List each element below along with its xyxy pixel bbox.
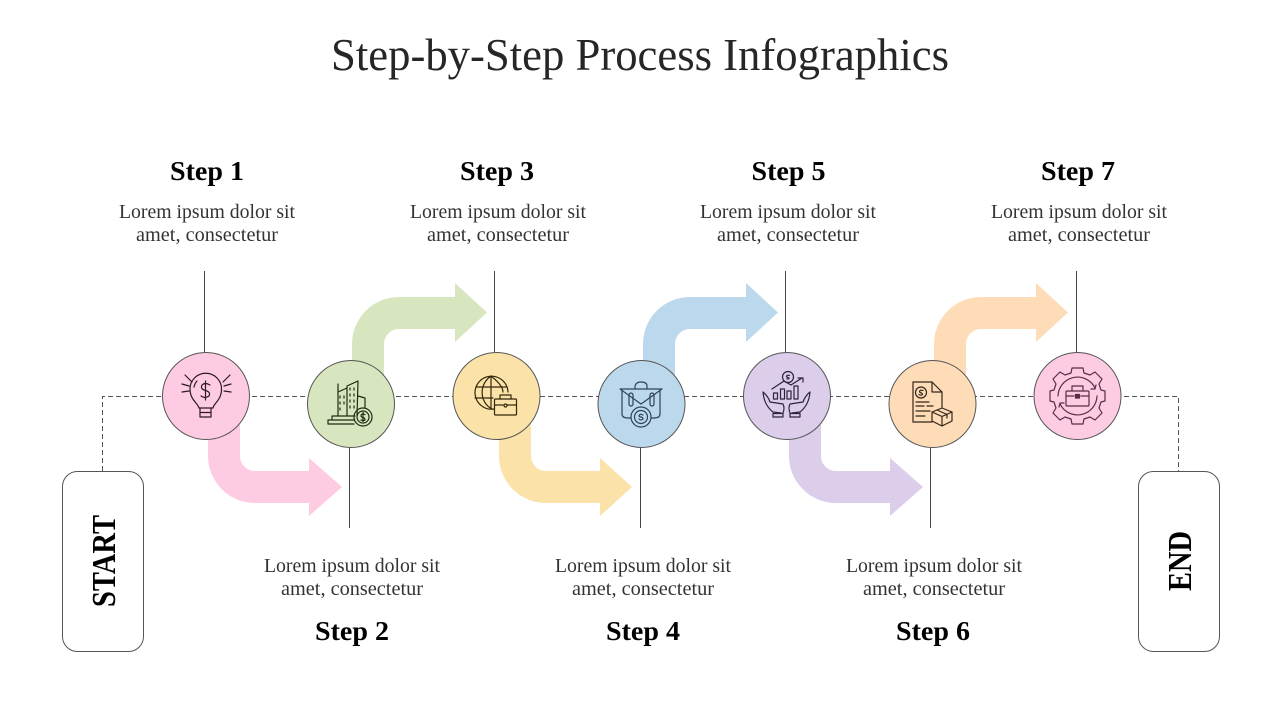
- step 6 text: [846, 555, 1022, 646]
- step 3 text: amet, consectetur: [427, 224, 569, 246]
- step 3 text: Step 3: [460, 156, 534, 186]
- arrow: orange: [950, 283, 1068, 375]
- step 6 text: amet, consectetur: [863, 578, 1005, 600]
- arrow: blue: [659, 283, 778, 375]
- step 5 text: [700, 156, 876, 246]
- node 1: lightbulb: [162, 352, 250, 440]
- node 5: hands with growth chart: [744, 352, 830, 440]
- arrow: pink: [224, 425, 342, 516]
- step 2 text: Step 2: [315, 616, 389, 646]
- step 1 text: Step 1: [170, 156, 244, 186]
- step 6 text: Lorem ipsum dolor sit: [846, 555, 1022, 577]
- end box: [1138, 472, 1220, 652]
- step 1 text: [119, 156, 295, 246]
- node 4: bag with coin: [598, 360, 685, 448]
- node 2: buildings: [308, 360, 394, 448]
- step 5 text: Step 5: [752, 156, 826, 186]
- step 7 text: [991, 156, 1167, 246]
- step 7 text: Lorem ipsum dolor sit: [991, 201, 1167, 223]
- step 4 text: amet, consectetur: [572, 578, 714, 600]
- step 3 text: Lorem ipsum dolor sit: [410, 201, 586, 223]
- step 2 text: Lorem ipsum dolor sit: [264, 555, 440, 577]
- node 6: document with box: [889, 360, 976, 448]
- title: Step-by-Step Process Infographics: [331, 29, 949, 80]
- start box: [62, 472, 144, 652]
- node 7: gear with briefcase: [1034, 352, 1121, 440]
- step 2 text: [264, 555, 440, 646]
- step 4 text: Step 4: [606, 616, 680, 646]
- dashed process line: [102, 396, 1178, 471]
- step 2 text: amet, consectetur: [281, 578, 423, 600]
- node 3: globe with briefcase: [453, 352, 540, 440]
- step 4 text: Lorem ipsum dolor sit: [555, 555, 731, 577]
- step 3 text: [410, 156, 586, 246]
- step 5 text: amet, consectetur: [717, 224, 859, 246]
- arrow: green: [368, 283, 487, 375]
- step 1 text: Lorem ipsum dolor sit: [119, 201, 295, 223]
- step 1 text: amet, consectetur: [136, 224, 278, 246]
- end box: END: [1162, 531, 1199, 591]
- arrow: yellow: [515, 425, 632, 516]
- connector lines: [204, 271, 1076, 528]
- step 4 text: [555, 555, 731, 646]
- start box: START: [86, 515, 123, 607]
- step 7 text: amet, consectetur: [1008, 224, 1150, 246]
- step 7 text: Step 7: [1041, 156, 1115, 186]
- step 6 text: Step 6: [896, 616, 970, 646]
- arrow: purple: [805, 425, 923, 516]
- step 5 text: Lorem ipsum dolor sit: [700, 201, 876, 223]
